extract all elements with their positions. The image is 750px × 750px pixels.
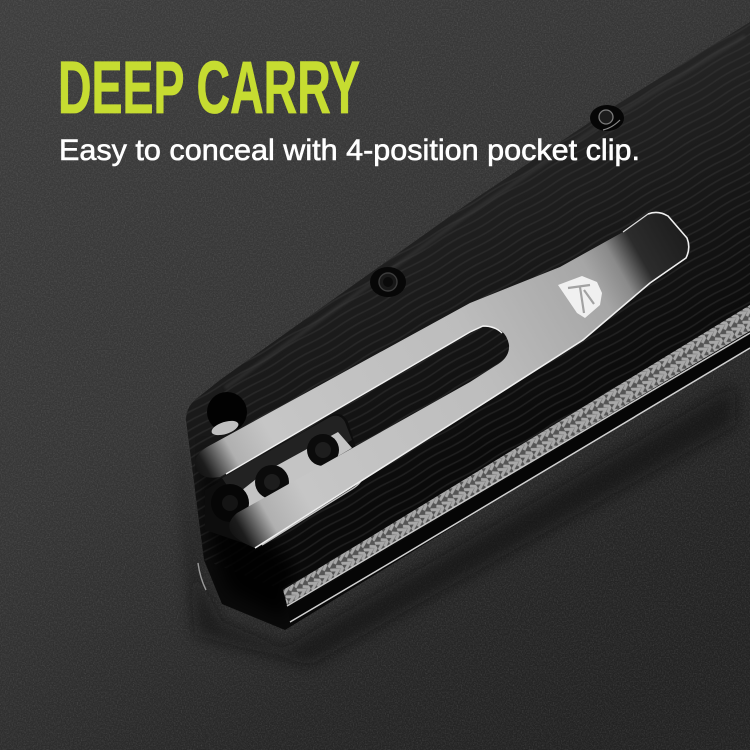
liner line lower bbox=[290, 348, 750, 622]
subtitle: Easy to conceal with 4-position pocket clip. bbox=[59, 134, 640, 167]
black channel between liners bbox=[288, 335, 750, 621]
plate lit band bbox=[232, 432, 352, 512]
title: DEEP CARRY bbox=[58, 46, 360, 129]
knife cast shadow bbox=[178, 385, 735, 665]
butt edge highlight bbox=[198, 563, 206, 590]
dark butt end of handle bbox=[200, 445, 295, 620]
slot edge highlight bbox=[226, 326, 502, 474]
textured edge strip bbox=[283, 305, 750, 605]
logo bbox=[558, 276, 602, 318]
knife body bbox=[186, 22, 750, 630]
plate base bbox=[205, 414, 363, 548]
plate screw 3 bbox=[211, 484, 249, 522]
clip lower edge highlight bbox=[255, 212, 689, 548]
plate screw 1 bbox=[307, 434, 339, 466]
clip tip top highlight bbox=[623, 214, 648, 232]
liner line upper bbox=[287, 333, 750, 606]
middle handle screw bbox=[370, 267, 406, 297]
clip mounting plate bbox=[205, 414, 363, 548]
plate screw 2 bbox=[255, 465, 289, 499]
plate rim highlight bbox=[262, 472, 363, 545]
handle scale bbox=[186, 22, 750, 630]
pocket clip bbox=[195, 212, 689, 548]
lanyard hole bbox=[207, 392, 247, 438]
upper handle screw bbox=[590, 105, 624, 131]
handle chamfer highlight bbox=[225, 36, 745, 388]
plate dark shaded band bbox=[222, 416, 352, 505]
handle weave texture bbox=[186, 22, 750, 590]
